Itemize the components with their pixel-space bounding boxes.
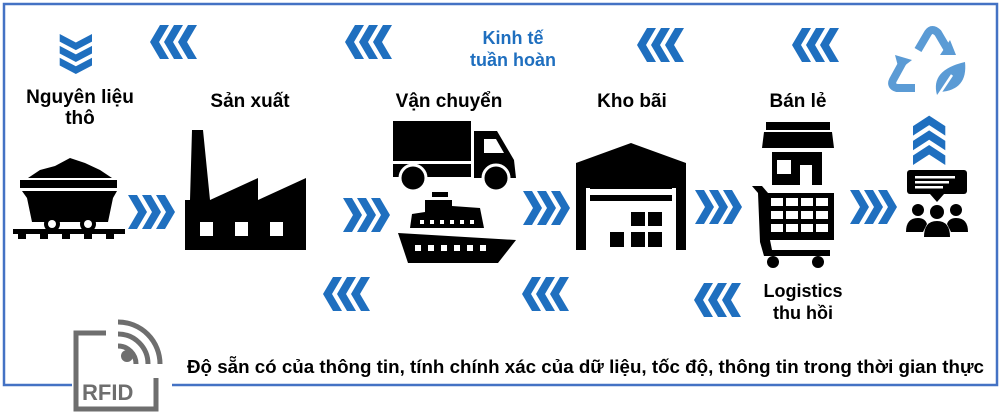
- arrow: right chevrons 5: [850, 190, 897, 224]
- icon: mine cart: [13, 158, 125, 239]
- icon: ship: [398, 192, 516, 263]
- arrow: right chevrons 1: [128, 195, 175, 229]
- label: reverse logistics: thu hồi: [773, 303, 833, 323]
- arrow: right chevrons 2: [343, 198, 390, 232]
- arrow: left chevrons top 3: [637, 28, 684, 62]
- icon: RFID: [76, 322, 160, 409]
- arrow: left chevrons top 4: [792, 28, 839, 62]
- icon: truck: [393, 121, 516, 191]
- icon: RFID: RFID: [82, 380, 133, 405]
- icon: consumers with speech bubble: [906, 170, 968, 237]
- arrow: up chevrons: [913, 116, 945, 165]
- arrow: left chevrons top 1: [150, 25, 197, 59]
- arrow: right chevrons 3: [523, 191, 570, 225]
- icon: store and shopping cart: [752, 122, 834, 268]
- icon: warehouse: [576, 143, 686, 250]
- heading: circular economy: [470, 28, 556, 70]
- label: transport: Vận chuyển: [396, 91, 502, 112]
- label: raw material: [26, 87, 134, 129]
- arrow: left chevrons bottom 3: [694, 283, 741, 317]
- label: warehouse: Kho bãi: [597, 91, 667, 112]
- label: reverse logistics: Logistics: [763, 281, 843, 301]
- arrow: left chevrons bottom 2: [522, 277, 569, 311]
- arrow: left chevrons bottom 1: [323, 277, 370, 311]
- icon: recycle leaf: [892, 30, 965, 102]
- arrow: down chevrons raw material: [60, 34, 92, 74]
- label: raw material: Nguyên liệu: [26, 87, 134, 108]
- icon: factory: [185, 130, 306, 250]
- arrow: left chevrons top 2: [345, 25, 392, 59]
- label: raw material: thô: [65, 108, 95, 129]
- heading: circular economy: tuần hoàn: [470, 50, 556, 70]
- label: production: Sản xuất: [210, 91, 290, 112]
- text: bottom caption: Độ sẵn có của thông tin, tính chính xác của dữ liệu, tốc độ, thông tin trong thời gian thực: [187, 355, 984, 377]
- label: reverse logistics: [763, 281, 843, 323]
- label: retail: Bán lẻ: [769, 91, 827, 112]
- arrow: right chevrons 4: [695, 190, 742, 224]
- heading: circular economy: Kinh tế: [482, 28, 544, 48]
